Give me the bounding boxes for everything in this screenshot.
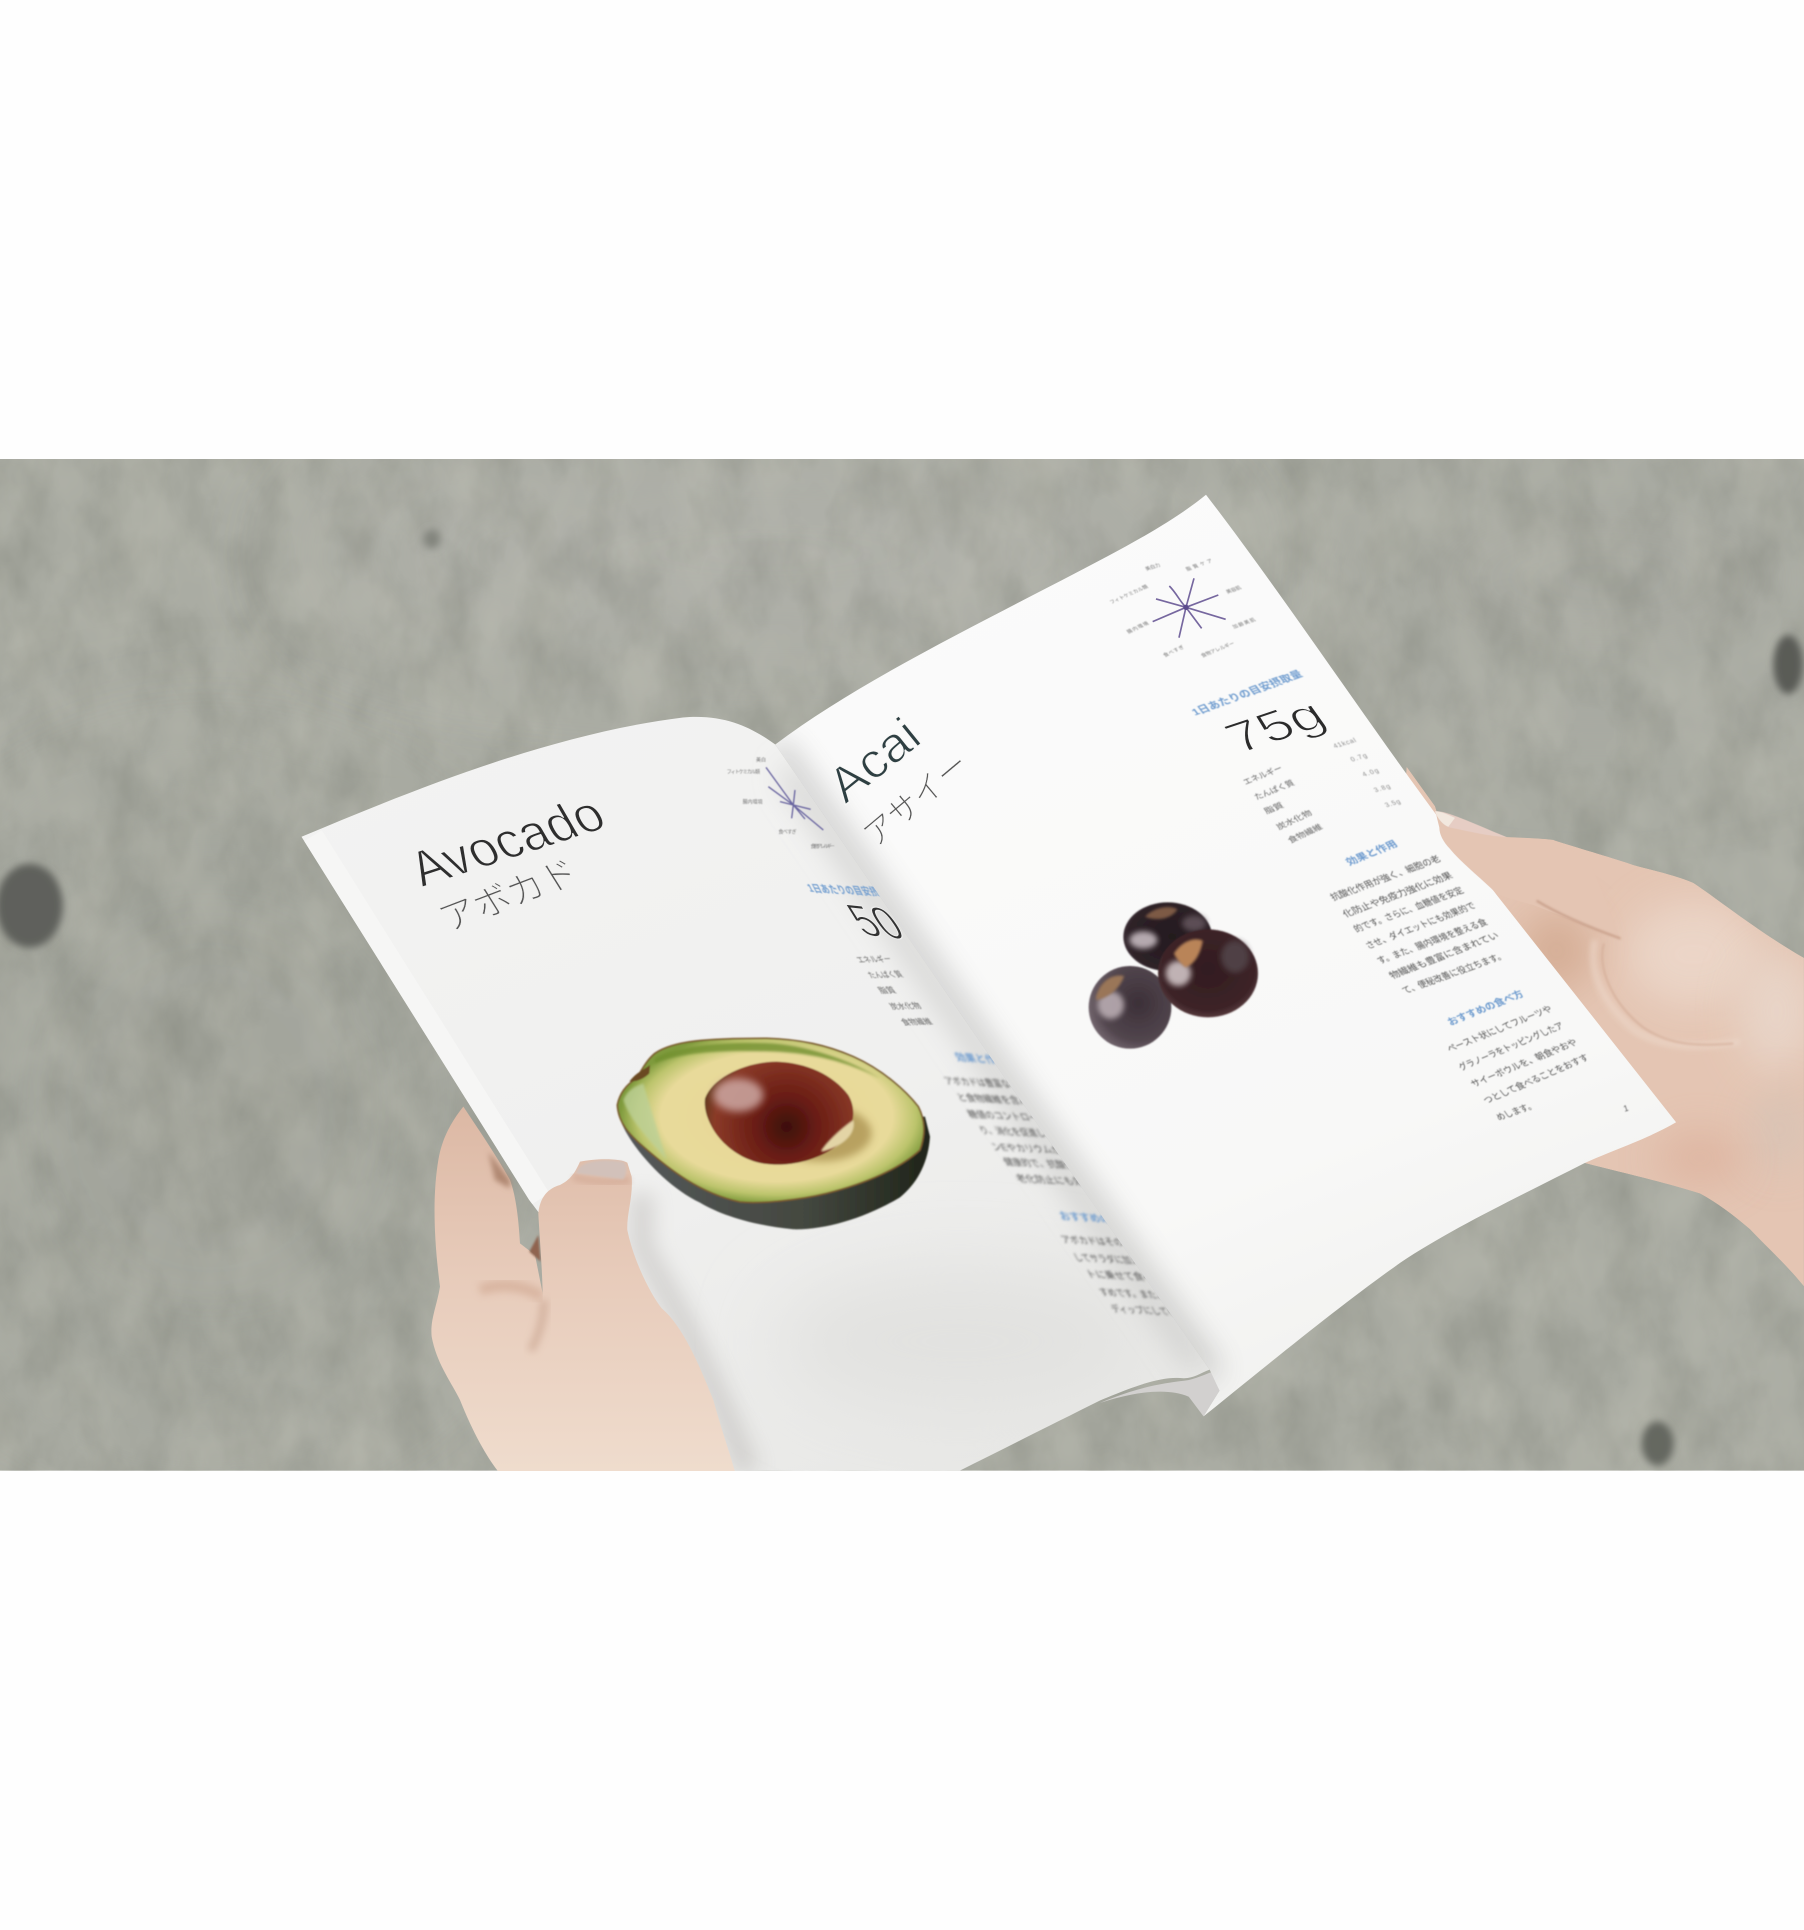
right page	[770, 490, 1690, 1440]
left page	[280, 700, 1250, 1480]
body: effects: 物繊維も豊富に含まれてい	[1387, 930, 1502, 981]
radar labels: 加齢美肌	[1231, 617, 1257, 630]
radar labels	[1108, 558, 1257, 659]
nutrition labels: avocado: たんぱく質	[865, 969, 905, 980]
acai berry top scar	[1145, 907, 1177, 919]
effects and recommended eating text: avocado: 健康的で、抗酸化作用があり	[1001, 1156, 1121, 1174]
finger shadow under page	[488, 1152, 510, 1188]
avocado seed shadow	[768, 1105, 872, 1162]
effects and recommended eating text: avocado: トに乗せて食べるのがおす	[1083, 1268, 1203, 1286]
nutrition values: acai: 4.0g	[1361, 768, 1381, 778]
left thumb nail	[576, 1160, 626, 1179]
acai berry top sheen	[1182, 915, 1206, 931]
palm crease line	[1602, 944, 1733, 1045]
avocado seed pale patch	[822, 1120, 854, 1152]
avocado seed	[705, 1062, 853, 1165]
body: effects: させ、ダイエットにも効果的で	[1363, 900, 1478, 951]
nutrition labels: acai	[1241, 764, 1325, 845]
subtitle: アサイー: アサイー	[856, 746, 975, 854]
avocado photo	[617, 1038, 930, 1229]
radar chart: avocado	[727, 757, 835, 850]
concrete tie hole right	[1773, 635, 1803, 694]
nutrition labels: avocado: エネルギー	[854, 954, 894, 964]
avocado light green streaks	[623, 1083, 667, 1160]
small concrete pit	[423, 529, 441, 549]
left hand finger behind book	[431, 1106, 543, 1471]
body: effects	[1328, 853, 1508, 996]
body: how to eat: グラノーラをトッピングしたア	[1456, 1020, 1567, 1073]
effects and recommended eating text: avocado	[941, 1050, 1228, 1321]
right hand behind book	[1400, 767, 1804, 1286]
acai berries photo	[1089, 902, 1258, 1049]
right page data column	[1108, 558, 1402, 845]
effects and recommended eating text: avocado: り、消化を促進します。ビタミ	[976, 1124, 1096, 1142]
wrist vein shading	[1764, 1111, 1795, 1148]
nutrition labels: acai: エネルギー	[1241, 764, 1285, 787]
right hand thumb over page	[1435, 810, 1621, 939]
left page lower shading	[775, 1268, 1144, 1415]
radar chart: avocado: 美白	[756, 757, 766, 764]
effects and recommended eating text: avocado: アボカドはそのままスライス	[1059, 1234, 1178, 1251]
nutrition labels: avocado: 炭水化物	[886, 1000, 924, 1011]
acai berry right sheen	[1221, 941, 1249, 973]
radar hub	[1183, 605, 1189, 610]
radar labels: 腸内環境	[1125, 620, 1151, 635]
subtitle: アボカド: アボカド	[432, 852, 587, 938]
body: effects: て、便秘改善に役立ちます。	[1399, 950, 1508, 996]
radar labels: 食べすぎ	[1162, 644, 1186, 659]
title: Avocado: Avocado	[399, 786, 615, 898]
daily intake heading: avocado: 1日あたりの目安摂取量	[805, 881, 898, 899]
thumb knuckle shading	[573, 1177, 630, 1182]
acai berry left highlight	[1097, 991, 1124, 1019]
acai berry top	[1123, 902, 1212, 971]
radar labels: フィトケミカル類	[1108, 584, 1150, 606]
acai berry top highlight	[1129, 931, 1157, 949]
left page block edge	[311, 837, 539, 1200]
body: how to eat: つとして食べることをおすす	[1481, 1053, 1592, 1106]
concrete wall background	[0, 459, 1804, 1471]
nutrition labels: avocado	[854, 954, 935, 1027]
daily intake amount: 75g: 75g	[1214, 689, 1335, 762]
effects and recommended eating text: avocado: すめです。また、スムージーや	[1097, 1287, 1216, 1304]
concrete tie hole left	[0, 864, 63, 948]
effects and recommended eating text: avocado: 老化防止にも効果的です。	[1013, 1172, 1133, 1190]
nutrition labels: acai: 食物繊維	[1285, 822, 1325, 845]
daily intake heading: acai: 1日あたりの目安摂取量	[1189, 668, 1305, 718]
wrist light patch	[1737, 951, 1804, 1072]
heading: effects: 効果と作用	[1343, 838, 1400, 868]
body: how to eat: めします。	[1494, 1101, 1539, 1123]
acai berry left	[1089, 966, 1171, 1049]
radar chart: avocado: 腸内環境	[743, 798, 763, 805]
effects and recommended eating text: avocado: してサラダに加えたり、トース	[1071, 1251, 1191, 1269]
acai berry right scar	[1174, 939, 1203, 967]
acai berry left scar	[1096, 975, 1124, 1000]
dark fold between finger and thumb	[529, 1235, 541, 1262]
thumb shadow on page	[642, 1193, 748, 1472]
radar labels: 美白力	[1144, 562, 1162, 572]
lower palm shading	[1666, 1131, 1736, 1185]
avocado seed highlight	[713, 1078, 763, 1112]
acai berry right highlight	[1166, 961, 1191, 986]
radar chart: avocado: フィトケミカル類	[727, 768, 760, 775]
body: how to eat: ペースト状にしてフルーツや	[1444, 1003, 1555, 1055]
body: effects: 的です。さらに、血糖値を安定	[1351, 885, 1467, 935]
concrete tie hole bottom	[1642, 1421, 1674, 1466]
left hand thumb	[498, 1159, 735, 1472]
effects and recommended eating text: avocado: ンEやカリウムが多く、肌の	[989, 1141, 1109, 1159]
nutrition values: acai: 0.7g	[1349, 753, 1369, 763]
nutrition labels: acai: たんぱく質	[1252, 778, 1297, 802]
body: effects: 抗酸化作用が強く、細胞の老	[1328, 853, 1444, 903]
body: effects: す。また、腸内環境を整える食	[1374, 917, 1490, 966]
photograph	[0, 459, 1804, 1480]
heading: how to eat: おすすめの食べ方	[1444, 988, 1527, 1028]
effects and recommended eating text: avocado: アボカドは豊富な不飽和脂肪酸	[941, 1075, 1061, 1093]
nutrition values: acai: 3.8g	[1373, 783, 1392, 794]
radar labels: 食物アレルギー	[1199, 640, 1236, 659]
left page data column (radar and daily intake)	[727, 757, 1228, 1321]
avocado stem notch	[629, 1065, 650, 1082]
page number: 1	[1622, 1103, 1630, 1114]
shadow under thumb	[1520, 911, 1593, 990]
effects and recommended eating text: avocado: 糖値のコントロールに役立ち	[965, 1108, 1085, 1126]
nutrition values: acai	[1332, 737, 1402, 809]
body: how to eat: サイーボウルを、朝食やおや	[1469, 1038, 1580, 1090]
radar chart: avocado: 食べすぎ	[778, 828, 797, 835]
avocado skin	[622, 1117, 930, 1229]
nutrition labels: acai: 脂質	[1262, 800, 1286, 816]
nutrition values: acai: 41kcal	[1332, 737, 1358, 750]
radar labels: 美容肌	[1225, 584, 1243, 595]
acai berry right	[1158, 929, 1258, 1017]
daily intake amount: 50g: 50g	[836, 895, 938, 952]
radar labels: 脂質ケア	[1184, 558, 1214, 573]
radar chart: avocado: 食物アレルギー	[811, 843, 835, 850]
nutrition labels: avocado: 食物繊維	[898, 1016, 935, 1027]
palm light patch	[1627, 901, 1760, 1008]
radar chart: acai	[1108, 558, 1257, 659]
left page shade along spine	[788, 769, 1200, 1366]
effects and recommended eating text: acai	[1328, 838, 1630, 1123]
effects and recommended eating text: avocado: と食物繊維を含んでおり、血	[954, 1091, 1074, 1109]
body: how to eat	[1444, 1003, 1592, 1123]
effects and recommended eating text: avocado: ディップにしても美味しいです	[1108, 1303, 1228, 1321]
effects and recommended eating text: avocado: 効果と作用	[952, 1050, 1009, 1067]
valley shading between finger and thumb	[531, 1300, 544, 1351]
book page stack at spine	[1100, 1372, 1220, 1416]
right thumb nail tip	[1435, 811, 1455, 827]
thumb fold line	[1537, 901, 1621, 939]
radar spokes	[1153, 578, 1226, 638]
knuckle crease	[480, 1286, 542, 1297]
nutrition values: acai: 3.5g	[1384, 799, 1402, 809]
avocado flesh	[617, 1038, 924, 1202]
avocado top green band	[655, 1043, 880, 1078]
palm crease highlight	[1593, 940, 1740, 1046]
body: effects: 化防止や免疫力強化に効果	[1340, 870, 1456, 920]
nutrition labels: avocado: 脂質	[875, 985, 898, 995]
right thumb nail	[1435, 811, 1507, 837]
spine shadow	[775, 745, 1212, 1376]
title: Acai: Acai	[818, 707, 931, 813]
nutrition labels: acai: 炭水化物	[1274, 808, 1314, 832]
effects and recommended eating text: avocado: おすすめの食べ方	[1056, 1209, 1143, 1228]
